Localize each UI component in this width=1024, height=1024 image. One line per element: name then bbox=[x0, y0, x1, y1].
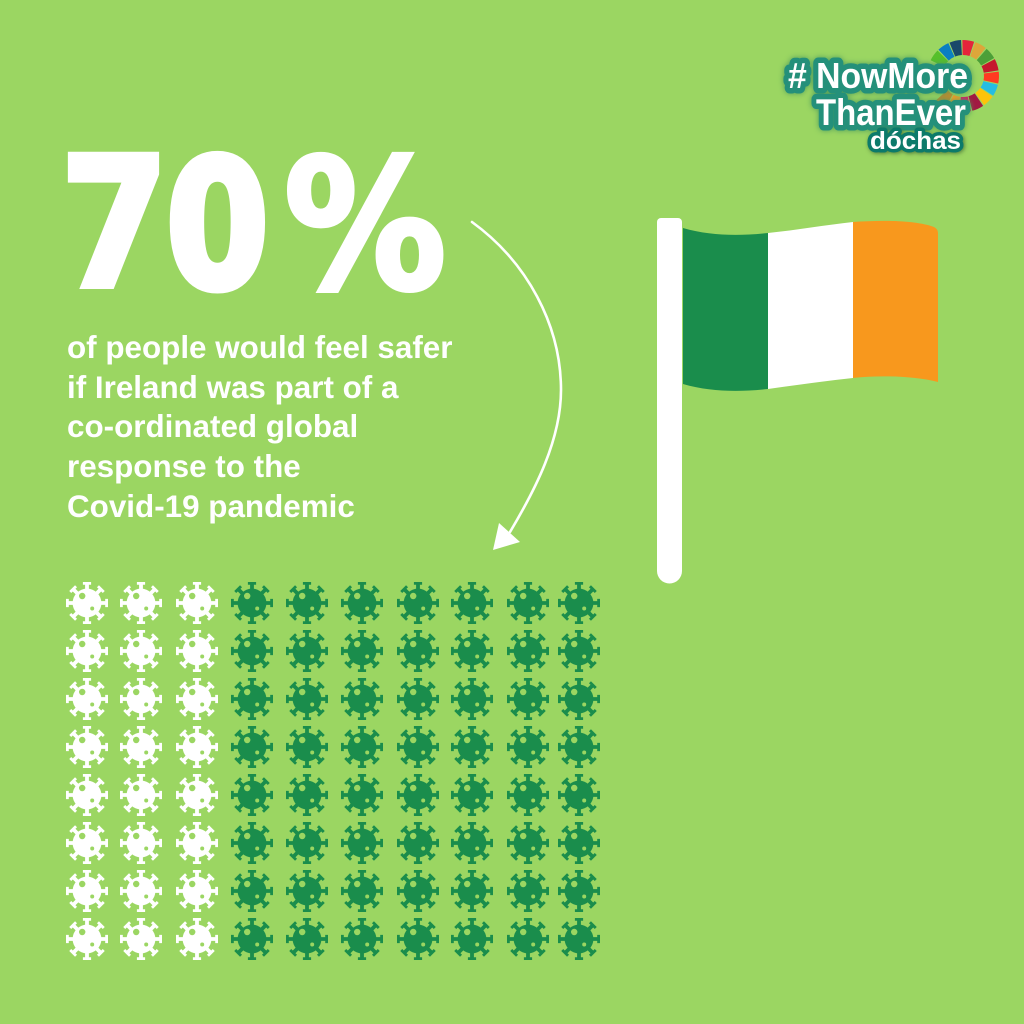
arrow: curved pointer to the grid bbox=[472, 222, 561, 550]
body text: co-ordinated global bbox=[67, 409, 358, 444]
body text: of people would feel safer bbox=[67, 330, 452, 365]
body text: if Ireland was part of a bbox=[67, 370, 399, 405]
headline: 70%: % bbox=[284, 122, 446, 331]
flag white stripe bbox=[768, 222, 853, 389]
logo: NowMoreThanEver dóchas bbox=[788, 46, 993, 155]
logo: dochas wordmark: dóchas bbox=[870, 127, 961, 155]
logo: hashtag text bbox=[788, 55, 968, 133]
pictogram grid: 7 green virus columns bbox=[231, 582, 600, 960]
body text bbox=[67, 330, 452, 524]
flag green stripe bbox=[683, 228, 768, 391]
pictogram grid: 3 white virus columns bbox=[66, 582, 218, 960]
body text: Covid-19 pandemic bbox=[67, 489, 355, 524]
logo: SDG colour wheel bbox=[937, 46, 993, 106]
headline: 70% bbox=[60, 118, 446, 331]
headline: 70%: 7 bbox=[60, 118, 169, 329]
flag orange stripe bbox=[853, 221, 938, 382]
headline: 70%: 0 bbox=[166, 122, 269, 329]
logo: hashtag text: # NowMore bbox=[788, 55, 968, 96]
body text: response to the bbox=[67, 449, 301, 484]
flag pole bbox=[657, 218, 682, 584]
icon: Irish flag bbox=[657, 218, 938, 584]
logo: hashtag text: ThanEver bbox=[816, 92, 966, 133]
